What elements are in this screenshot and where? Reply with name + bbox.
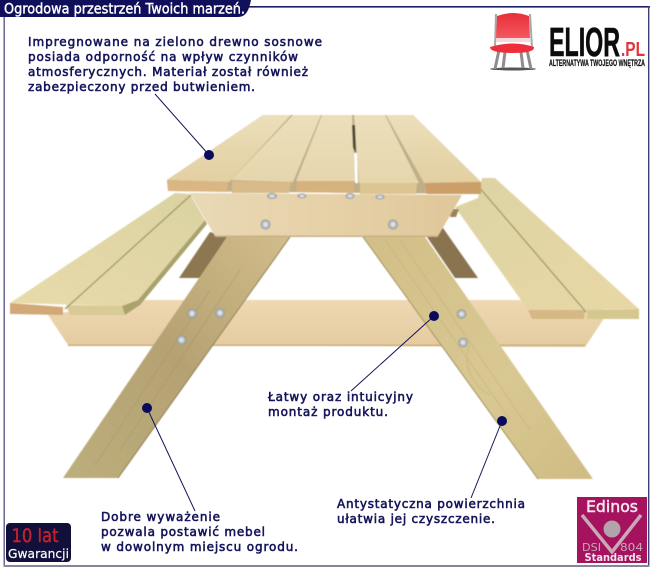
callout: easy assembly: [267, 311, 439, 419]
callout: antistatic surface: [337, 416, 525, 526]
icon: red chair: [490, 13, 536, 70]
callout: good balance: w dowolnym miejscu ogrodu.: [101, 540, 298, 554]
callout: wood impregnation: zabezpieczony przed butwieniem.: [28, 80, 255, 94]
badge: Edinos standards: [577, 497, 647, 564]
picnic table photo illustration: [10, 115, 639, 479]
callout: easy assembly: Łatwy oraz intuicyjny: [267, 390, 413, 404]
table apron: [190, 193, 462, 237]
callout: good balance: Dobre wyważenie: [101, 510, 220, 524]
badge: 10 year warranty: [6, 523, 71, 562]
callout: easy assembly: montaż produktu.: [268, 405, 388, 419]
logo: Elior: [490, 13, 645, 70]
badge: Edinos standards: Standards: [584, 551, 642, 564]
callout: antistatic surface: Antystatyczna powierzchnia: [337, 497, 525, 511]
table top planks: [167, 115, 481, 194]
callout: wood impregnation: posiada odporność na wpływ czynników: [28, 50, 298, 64]
badge: Edinos standards: DSI: [582, 541, 601, 554]
callout: wood impregnation: Impregnowane na zielono drewno sosnowe: [28, 35, 322, 49]
front legs: [63, 237, 593, 479]
cross beam: [48, 300, 603, 347]
right bench: [450, 178, 639, 319]
callout: antistatic surface: ułatwia jej czyszczenie.: [337, 512, 495, 526]
callout: wood impregnation: atmosferycznych. Materiał został również: [28, 65, 308, 79]
callout: wood impregnation: [28, 35, 322, 160]
badge: 10 year warranty: 10 lat: [12, 525, 58, 547]
badge: 10 year warranty: Gwarancji: [8, 546, 69, 561]
callout: good balance: pozwala postawić mebel: [101, 525, 265, 539]
badge: Edinos standards: Edinos: [586, 497, 638, 516]
bolts: [177, 193, 468, 347]
left bench: [10, 193, 207, 315]
rear legs: [179, 228, 478, 278]
badge: Edinos standards: 804: [620, 541, 643, 554]
title bar: Ogrodowa przestrzeń Twoich marzeń.: [4, 2, 245, 18]
callout: good balance: [101, 403, 298, 554]
